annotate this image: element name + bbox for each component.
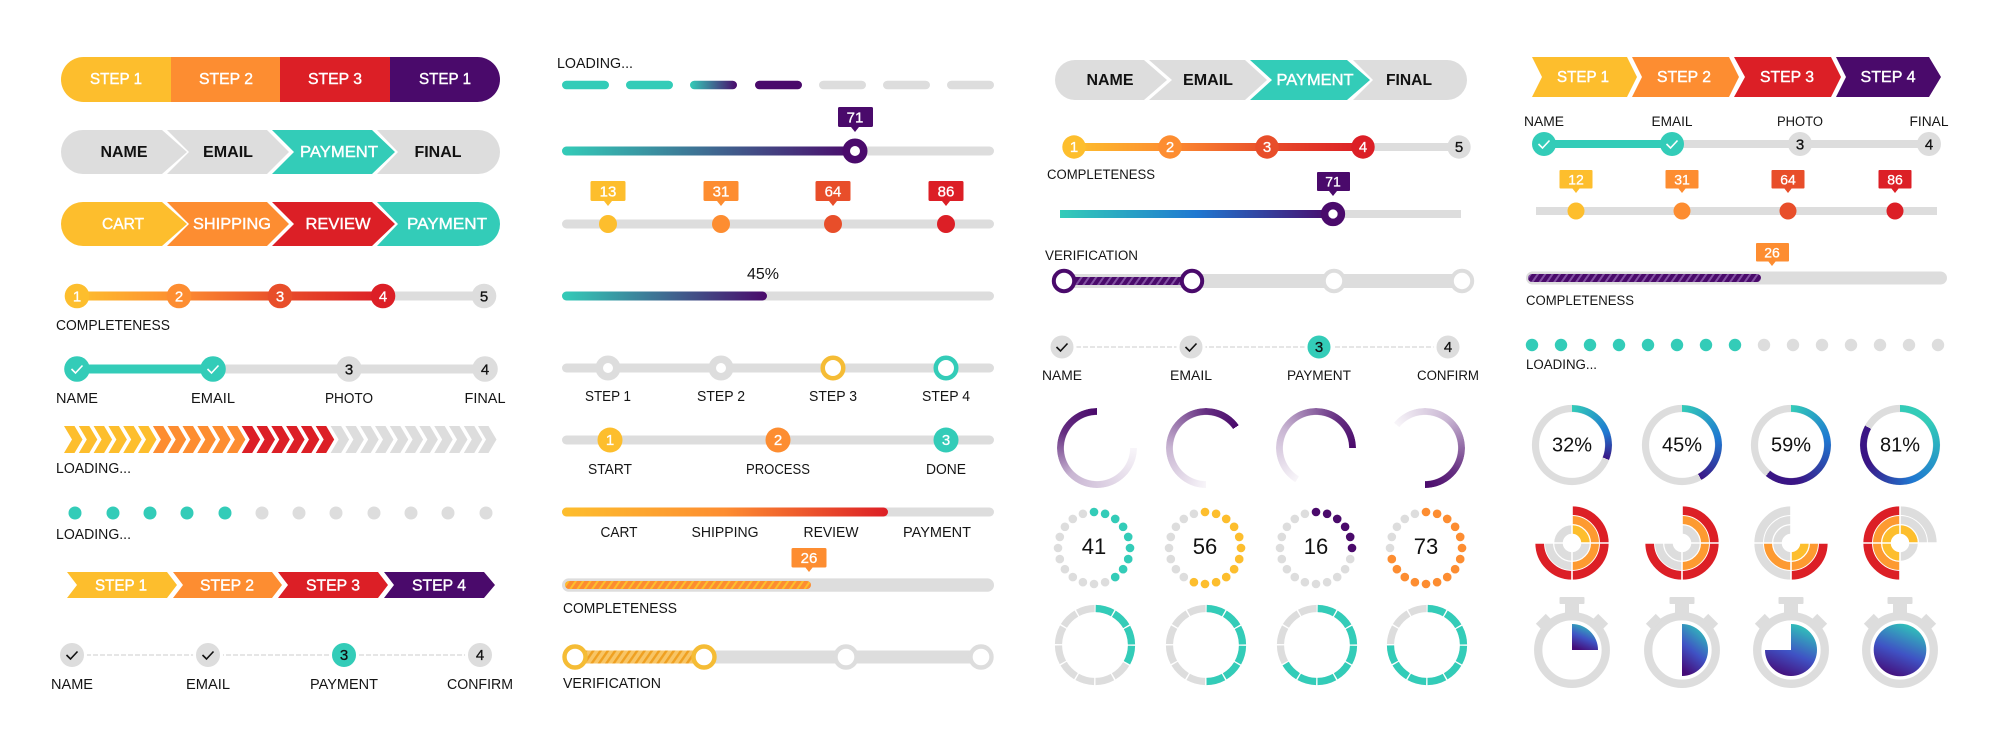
dashed check stepper: CONFIRM bbox=[447, 677, 513, 693]
purple striped verification stepper bbox=[1045, 248, 1472, 291]
striped completeness bar with value 26: COMPLETENESS bbox=[563, 601, 677, 617]
gray chevron form bar: PAYMENT bbox=[1276, 72, 1354, 89]
check stepper with labels above: FINAL bbox=[1910, 114, 1949, 129]
stopwatch timers bbox=[1536, 597, 1936, 684]
segmented dash loading bar bbox=[557, 56, 994, 89]
dotted number rings: 73 bbox=[1414, 534, 1438, 559]
dotted loading indicator bbox=[56, 506, 492, 543]
numbered completeness stepper: COMPLETENESS bbox=[56, 318, 170, 334]
dotted loading indicator: LOADING... bbox=[56, 527, 131, 543]
striped completeness bar with value 26 bbox=[562, 548, 994, 617]
numbered completeness stepper bbox=[1047, 135, 1471, 182]
colored pill step bar: STEP 1 bbox=[90, 71, 142, 88]
dashed check stepper: 4 bbox=[476, 647, 484, 664]
check stepper with labels: EMAIL bbox=[191, 391, 235, 407]
colored chevron checkout bar: PAYMENT bbox=[407, 216, 487, 233]
check stepper with labels above: EMAIL bbox=[1652, 114, 1693, 129]
arrow step bar: STEP 4 bbox=[412, 578, 466, 594]
gray chevron form bar: EMAIL bbox=[203, 144, 253, 161]
dotted number rings: 41 bbox=[1082, 534, 1106, 559]
numbered completeness stepper: 4 bbox=[379, 288, 387, 306]
start process done stepper: START bbox=[588, 462, 632, 478]
percentage gauge rings: 81% bbox=[1880, 434, 1920, 456]
panel: column 3 steppers and rings bbox=[1042, 60, 1479, 686]
numbered completeness stepper: 5 bbox=[1455, 139, 1463, 156]
percentage gauge rings bbox=[1532, 405, 1940, 485]
colored chevron checkout bar: CART bbox=[102, 216, 144, 233]
gray chevron form bar bbox=[1055, 60, 1467, 100]
dotted number rings: 56 bbox=[1193, 534, 1217, 559]
dashed check stepper: PAYMENT bbox=[310, 677, 378, 693]
arrow step bar: STEP 2 bbox=[1657, 69, 1711, 86]
slider with four tooltips: 31 bbox=[713, 184, 729, 200]
segmented dash loading bar: LOADING... bbox=[557, 56, 633, 72]
slider with four tooltips bbox=[562, 181, 994, 233]
arrow step bar: STEP 3 bbox=[306, 578, 360, 594]
ring stepper steps 1 to 4: STEP 2 bbox=[697, 389, 745, 405]
gray chevron form bar: FINAL bbox=[414, 144, 462, 161]
arrow step bar: STEP 1 bbox=[1557, 69, 1609, 86]
ring stepper steps 1 to 4: STEP 3 bbox=[809, 389, 857, 405]
gray chevron form bar: NAME bbox=[1086, 72, 1134, 89]
slider with four tooltips: 86 bbox=[938, 184, 954, 200]
fading purple spinner rings bbox=[1057, 408, 1465, 488]
checkout gradient bar: REVIEW bbox=[804, 525, 859, 541]
check stepper with labels above: 3 bbox=[1796, 136, 1804, 154]
ring stepper steps 1 to 4: STEP 1 bbox=[585, 389, 631, 405]
slider with value 71: 71 bbox=[1325, 174, 1341, 190]
dotted number rings bbox=[1058, 512, 1462, 584]
dashed check stepper: 4 bbox=[1444, 339, 1452, 356]
dotted loading indicator: LOADING... bbox=[1526, 357, 1597, 372]
checkout gradient bar: PAYMENT bbox=[903, 525, 971, 541]
start process done stepper: PROCESS bbox=[746, 462, 810, 478]
check stepper with labels above: 4 bbox=[1925, 136, 1933, 154]
check stepper with labels above: NAME bbox=[1524, 114, 1564, 129]
arrow step bar: STEP 3 bbox=[1760, 69, 1814, 86]
percentage gauge rings: 59% bbox=[1771, 434, 1811, 456]
colored chevron checkout bar bbox=[61, 202, 500, 246]
dashed check stepper: EMAIL bbox=[186, 677, 230, 693]
purple striped completeness bar with value 26: 26 bbox=[1764, 244, 1780, 260]
colored pill step bar bbox=[61, 57, 500, 102]
numbered completeness stepper: COMPLETENESS bbox=[1047, 167, 1155, 182]
45 percent progress bar: 45% bbox=[747, 266, 779, 283]
dotted number rings: 16 bbox=[1304, 534, 1328, 559]
start process done stepper: 3 bbox=[942, 432, 950, 449]
slider with four tooltips: 86 bbox=[1887, 172, 1903, 188]
start process done stepper: 1 bbox=[606, 432, 614, 449]
colored pill step bar: STEP 2 bbox=[199, 71, 253, 88]
start process done stepper: 2 bbox=[774, 432, 782, 449]
slider with four tooltips: 64 bbox=[1780, 172, 1796, 188]
segmented teal rings bbox=[1058, 608, 1464, 682]
gray chevron form bar: NAME bbox=[100, 144, 148, 161]
45 percent progress bar bbox=[562, 266, 994, 300]
dashed check stepper: 3 bbox=[1315, 339, 1323, 356]
start process done stepper bbox=[562, 428, 994, 478]
slider with four tooltips: 31 bbox=[1674, 172, 1690, 188]
numbered completeness stepper bbox=[56, 284, 496, 334]
numbered completeness stepper: 1 bbox=[1070, 139, 1078, 156]
colored pill step bar: STEP 1 bbox=[419, 71, 471, 88]
colored pill step bar: STEP 3 bbox=[308, 71, 362, 88]
purple striped completeness bar with value 26 bbox=[1526, 243, 1947, 308]
arrow step bar: STEP 1 bbox=[95, 578, 147, 594]
striped verification stepper bbox=[563, 646, 992, 692]
striped completeness bar with value 26: 26 bbox=[801, 550, 817, 567]
dashed check stepper: 3 bbox=[340, 647, 348, 664]
start process done stepper: DONE bbox=[926, 462, 966, 478]
dashed check stepper: PAYMENT bbox=[1287, 368, 1351, 383]
slider with value 71 bbox=[1060, 172, 1461, 222]
numbered completeness stepper: 4 bbox=[1359, 139, 1367, 156]
percentage gauge rings: 32% bbox=[1552, 434, 1592, 456]
panel: column 4 steps, gauges and timers bbox=[1524, 57, 1949, 688]
check stepper with labels: 3 bbox=[345, 362, 353, 378]
slider with value 71: 71 bbox=[847, 110, 863, 126]
panel: column 1 progress bars bbox=[51, 57, 513, 693]
chevron loading bar bbox=[56, 426, 496, 477]
check stepper with labels: 4 bbox=[481, 362, 489, 378]
slider with value 71 bbox=[562, 107, 994, 160]
purple striped completeness bar with value 26: COMPLETENESS bbox=[1526, 293, 1634, 308]
numbered completeness stepper: 3 bbox=[1263, 139, 1271, 156]
purple striped verification stepper: VERIFICATION bbox=[1045, 248, 1138, 263]
check stepper with labels above: PHOTO bbox=[1777, 114, 1823, 129]
chevron loading bar: LOADING... bbox=[56, 461, 131, 477]
panel: column 2 sliders and bars bbox=[557, 56, 994, 692]
ring stepper steps 1 to 4: STEP 4 bbox=[922, 389, 970, 405]
arrow step bar bbox=[1532, 57, 1941, 97]
arrow step bar: STEP 2 bbox=[200, 578, 254, 594]
striped verification stepper: VERIFICATION bbox=[563, 676, 661, 692]
dashed check stepper: CONFIRM bbox=[1417, 368, 1479, 383]
colored chevron checkout bar: SHIPPING bbox=[193, 216, 271, 233]
dotted loading indicator bbox=[1526, 339, 1944, 372]
numbered completeness stepper: 3 bbox=[276, 288, 284, 306]
checkout gradient bar bbox=[562, 508, 994, 541]
dashed check stepper bbox=[51, 642, 513, 693]
slider with four tooltips: 12 bbox=[1568, 172, 1584, 188]
ring stepper steps 1 to 4 bbox=[562, 358, 994, 405]
slider with four tooltips: 64 bbox=[825, 184, 841, 200]
gray chevron form bar bbox=[61, 130, 500, 174]
checkout gradient bar: SHIPPING bbox=[692, 525, 758, 541]
arrow step bar bbox=[67, 572, 495, 598]
check stepper with labels: NAME bbox=[56, 391, 98, 407]
slider with four tooltips bbox=[1536, 170, 1937, 220]
numbered completeness stepper: 2 bbox=[175, 288, 183, 306]
numbered completeness stepper: 5 bbox=[480, 288, 488, 306]
gray chevron form bar: PAYMENT bbox=[300, 144, 378, 161]
quadrant ring charts bbox=[1534, 505, 1938, 581]
dashed check stepper: EMAIL bbox=[1170, 368, 1213, 383]
dashed check stepper: NAME bbox=[1042, 368, 1082, 383]
numbered completeness stepper: 2 bbox=[1166, 139, 1174, 156]
check stepper with labels above bbox=[1524, 114, 1949, 156]
slider with four tooltips: 13 bbox=[600, 184, 616, 200]
checkout gradient bar: CART bbox=[600, 525, 638, 541]
dashed check stepper: NAME bbox=[51, 677, 93, 693]
gray chevron form bar: EMAIL bbox=[1183, 72, 1233, 89]
gray chevron form bar: FINAL bbox=[1386, 72, 1432, 89]
check stepper with labels: PHOTO bbox=[325, 391, 373, 407]
arrow step bar: STEP 4 bbox=[1860, 69, 1916, 86]
colored chevron checkout bar: REVIEW bbox=[306, 216, 371, 233]
percentage gauge rings: 45% bbox=[1662, 434, 1702, 456]
numbered completeness stepper: 1 bbox=[73, 288, 81, 306]
dashed check stepper bbox=[1042, 334, 1479, 383]
check stepper with labels bbox=[56, 356, 506, 407]
check stepper with labels: FINAL bbox=[464, 391, 506, 407]
